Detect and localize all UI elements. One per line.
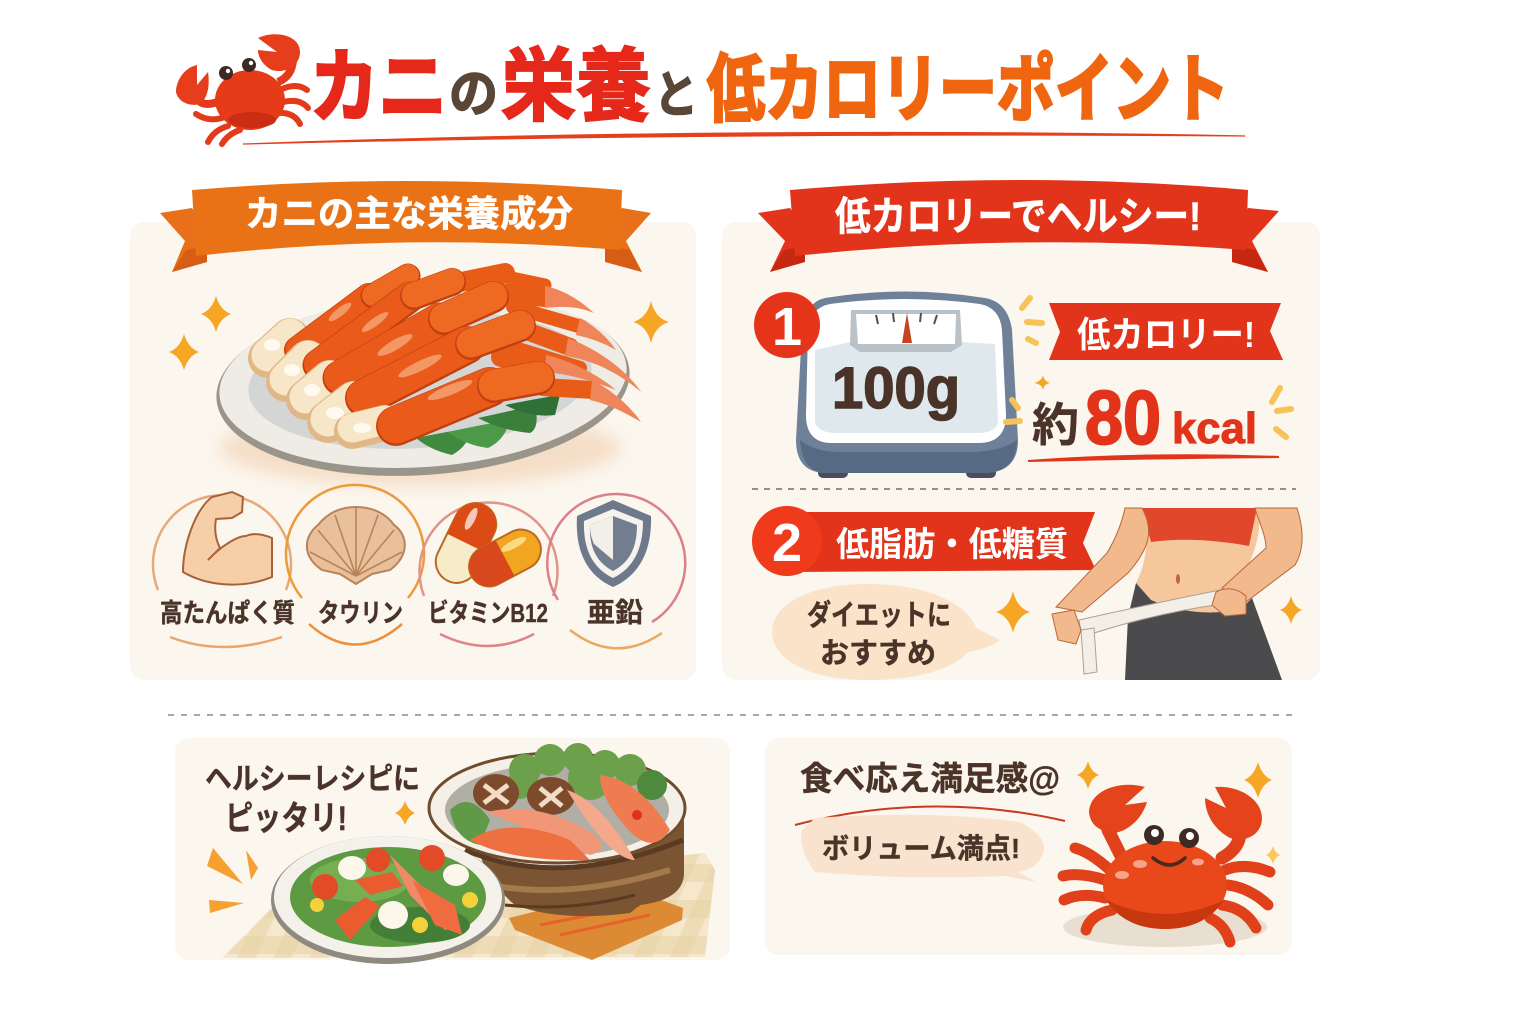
speech bubble: full volume: ボリューム満点!	[822, 833, 1020, 864]
icon: shield	[577, 500, 651, 587]
leg C	[306, 296, 493, 400]
ribbon heading: nutrients: カニの主な栄養成分	[245, 193, 573, 234]
recipe text: ヘルシーレシピに	[205, 763, 420, 796]
speech bubble: recommended for diet: おすすめ	[820, 638, 936, 670]
number badge 1	[754, 292, 820, 358]
calorie value: 80	[1085, 376, 1161, 461]
illustration: waist measuring	[1052, 508, 1302, 680]
panel background	[130, 222, 696, 680]
title text: 低カロリーポイント: 低カロリーポイント	[707, 48, 1229, 131]
title text: カニ: カニ	[310, 43, 447, 132]
speech bubble: recommended for diet	[772, 584, 1000, 680]
section divider	[168, 714, 1298, 716]
leg B	[286, 281, 452, 382]
accent rays	[1006, 298, 1291, 437]
calorie value: kcal	[1172, 404, 1257, 453]
panel background	[722, 222, 1320, 680]
panel background	[765, 738, 1292, 955]
nutrient: vitamin B12	[420, 496, 557, 646]
label: ビタミンB12	[428, 598, 548, 628]
calorie value	[1028, 375, 1279, 461]
inner divider	[752, 488, 1296, 490]
scale reading: 100g	[832, 356, 960, 421]
recipe text: ピッタリ!	[225, 800, 347, 838]
title	[176, 34, 1245, 144]
panel: low calorie	[722, 180, 1320, 680]
leaves	[416, 395, 560, 455]
banner: low fat low sugar: 低脂肪・低糖質	[836, 526, 1068, 564]
ribbon heading: low calorie: 低カロリーでヘルシー!	[835, 195, 1201, 239]
nutrient: zinc	[547, 494, 685, 648]
label: 亜鉛	[587, 598, 643, 628]
illustration: scale	[796, 292, 1018, 478]
title text: と: と	[654, 67, 698, 123]
panel: nutrients	[130, 181, 696, 680]
ribbon heading: low calorie	[758, 180, 1279, 272]
salad plate	[271, 836, 505, 964]
leg E	[352, 377, 538, 431]
icon: shell	[307, 507, 405, 584]
checked tablecloth	[222, 853, 715, 958]
illustration: crab legs on plate	[210, 273, 641, 489]
banner: low fat low sugar	[790, 512, 1096, 572]
label: タウリン	[318, 598, 403, 628]
number badge 2: 2	[772, 513, 802, 573]
leg D	[328, 325, 520, 422]
icon: flexed arm	[183, 492, 272, 585]
sparkle	[395, 801, 415, 825]
sparkles	[169, 296, 669, 370]
panel: satisfying volume	[765, 738, 1292, 955]
icon: capsules	[429, 496, 548, 593]
recipe text	[205, 763, 420, 838]
satisfaction heading: 食べ応え満足感@	[800, 760, 1060, 797]
title text: の: の	[449, 66, 498, 124]
title text: 栄養: 栄養	[501, 42, 651, 131]
tag: low calorie	[1049, 303, 1283, 360]
hot pot bowl	[429, 743, 685, 916]
leg A	[268, 275, 408, 358]
panel background	[175, 738, 730, 960]
nutrient: taurine	[286, 485, 424, 644]
scale needle	[902, 313, 912, 343]
tag: low calorie: 低カロリー!	[1077, 314, 1255, 355]
calorie value: 約	[1032, 399, 1079, 451]
number badge 1: 1	[772, 297, 802, 357]
speech bubble: full volume	[801, 815, 1044, 882]
label: 高たんぱく質	[160, 598, 295, 628]
number badge 2	[752, 506, 822, 576]
sparkles	[996, 591, 1302, 633]
sparkles	[1077, 761, 1280, 864]
cutting board	[509, 888, 683, 960]
accent rays	[207, 848, 258, 913]
speech bubble: recommended for diet: ダイエットに	[807, 598, 951, 632]
icon: title crab	[176, 34, 308, 144]
illustration: smiling crab	[1063, 785, 1270, 947]
title underline	[243, 132, 1245, 144]
red curved line	[795, 806, 1065, 825]
nutrient: high protein	[153, 492, 295, 647]
ribbon heading: nutrients	[160, 181, 651, 272]
panel: healthy recipes	[175, 738, 730, 964]
